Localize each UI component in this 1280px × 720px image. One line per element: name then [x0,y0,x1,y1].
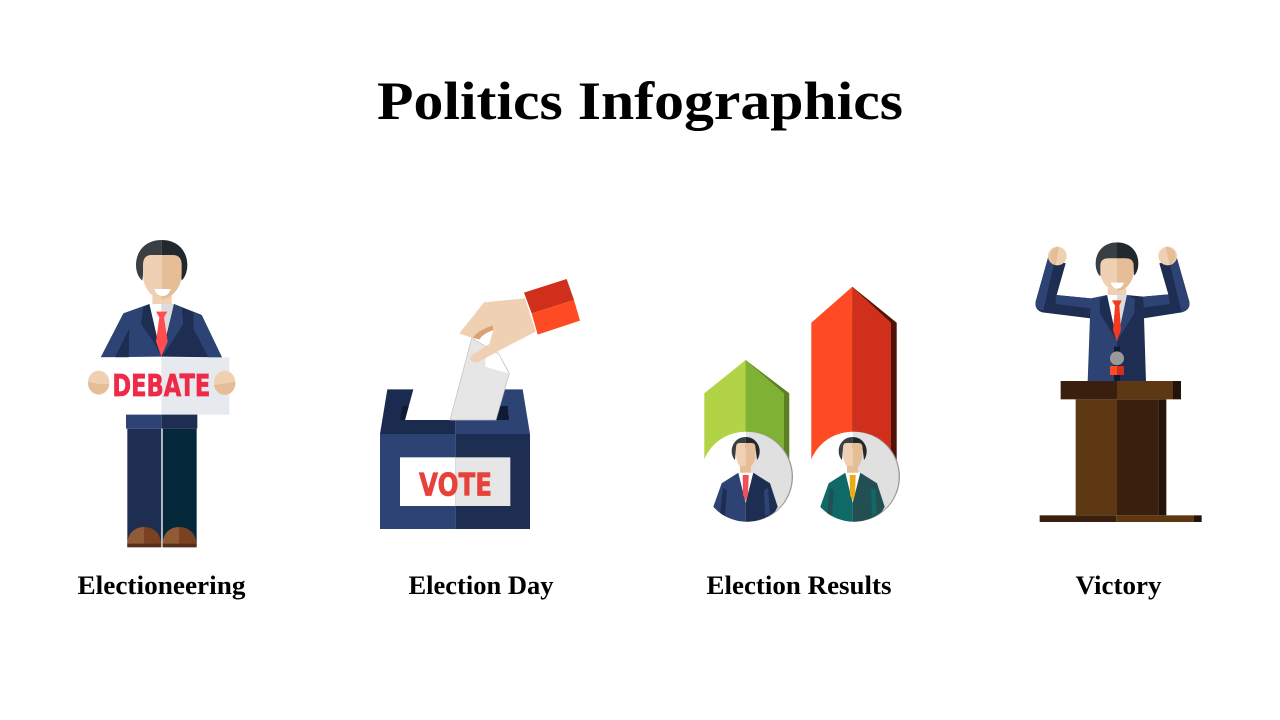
vote label: VOTE [419,467,492,503]
hair [1096,242,1138,276]
sleeve [524,279,580,335]
debate sign: DEBATE [112,369,210,404]
jacket [101,304,222,357]
microphone [1110,347,1124,382]
trousers [126,415,197,547]
label: Electioneering: Electioneering [78,571,246,600]
icon: podium [1040,381,1202,522]
torso [1088,295,1146,382]
hair [136,240,187,281]
fists [1048,247,1177,265]
label: Election Results: Election Results [706,571,892,600]
box front [380,434,530,529]
chart: election result arrows [701,287,900,530]
shoes [127,527,196,547]
neck [152,295,172,313]
icon: ballot box with hand [380,279,580,529]
icon: candidate holding debate sign [88,240,235,547]
icon: winner at podium [1035,242,1190,382]
candidate badge: blue [704,432,793,522]
vote label [400,457,510,506]
raised arms [1035,257,1190,318]
debate sign [90,357,229,415]
title: Politics Infographics [377,71,903,131]
ballot paper [450,338,509,420]
ballot box lid [380,389,530,434]
label: Election Day: Election Day [408,571,554,600]
podium base [1040,515,1202,522]
hands [88,371,235,395]
face [1100,258,1134,291]
label: Victory: Victory [1076,571,1162,600]
hand [459,298,536,363]
candidate badge: green [811,432,900,522]
tie [1112,300,1122,341]
shirt [149,304,161,357]
neck [1108,288,1126,302]
podium column [1076,399,1166,515]
green arrow [704,360,789,470]
face [143,255,182,299]
red arrow [811,287,897,470]
tie [156,312,168,357]
podium top [1061,381,1181,399]
